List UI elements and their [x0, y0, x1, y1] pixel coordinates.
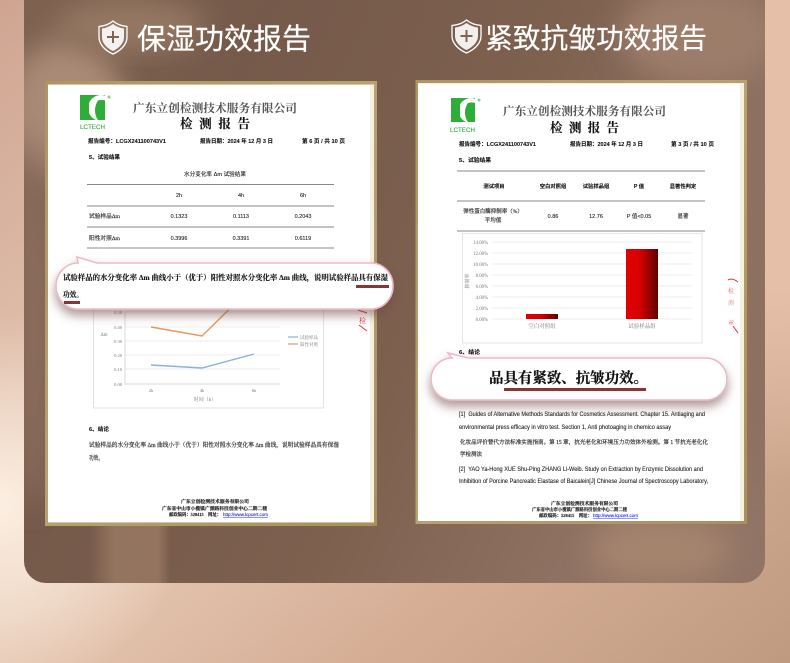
bar chart: elastase inhibition rate: [462, 234, 702, 343]
line chart: moisture change rate: 阳性对照: [300, 341, 318, 348]
results table: 阳性对照Δm: [89, 234, 121, 242]
bar chart: elastase inhibition rate: 空白对照组: [528, 322, 556, 330]
results table: 试验样品Δm: [89, 212, 121, 220]
red stamp fragment: 测: [728, 298, 734, 307]
conclusion text: 功效。: [89, 454, 103, 462]
footer address: 广东省中山市小榄镇广源路科技创业中心二期二楼: [532, 506, 627, 513]
line chart: moisture change rate: 4h: [200, 388, 205, 393]
report letterhead: 广东立创检测技术服务有限公司: [133, 101, 297, 115]
heading: moisturizing report: 保湿功效报告: [137, 23, 311, 56]
line chart: moisture change rate: 0.00: [114, 382, 123, 387]
logo: LCTECH: [80, 95, 114, 131]
logo: LCTECH: LCTECH: [450, 128, 475, 134]
report letterhead: [133, 101, 297, 131]
conclusion text: [89, 441, 339, 462]
results table: 0.1113: [233, 214, 249, 220]
conclusion heading: 6、结论: [459, 348, 481, 356]
report meta line: 报告日期：2024 年 12 月 3 日: [570, 140, 643, 148]
icon: shield with plus: [99, 21, 127, 54]
table title: 水分变化率 Δm 试验结果: [184, 170, 247, 178]
line chart: moisture change rate: 0.30: [114, 339, 123, 344]
report meta line: [459, 140, 715, 148]
results table: 0.2043: [295, 214, 311, 220]
bar chart: elastase inhibition rate: 8.00%: [476, 274, 488, 279]
results table: P 值: [634, 182, 645, 190]
report meta line: 报告日期：2024 年 12 月 3 日: [200, 137, 273, 145]
footer address: [162, 498, 268, 518]
line chart: moisture change rate: 0.40: [114, 325, 123, 330]
footer address: 邮政编码：528415 网址：: [169, 511, 221, 518]
footer address: http://www.lcpcert.com: [593, 513, 638, 518]
report letterhead: [503, 104, 666, 135]
results table: 0.6119: [295, 236, 311, 242]
line chart: moisture change rate: 试验样品: [300, 334, 318, 341]
callout: firming conclusion: [431, 353, 727, 400]
line chart: moisture change rate: 0.10: [114, 367, 123, 372]
references: Inhibition of Porcine Pancreatic Elastase of Baicalein[J] Chinese Journal of Spectroscopy Laboratory,: [459, 479, 708, 485]
report meta line: [88, 137, 346, 145]
callout: firming conclusion: 品具有紧致、抗皱功效。: [489, 369, 648, 387]
references: 学检测法: [460, 450, 482, 458]
bar chart: elastase inhibition rate: 4.00%: [476, 296, 488, 301]
results table: 显著: [677, 212, 689, 220]
bar chart: elastase inhibition rate: 0.00%: [476, 318, 488, 323]
footer address: [532, 500, 638, 519]
callout: moisturizing conclusion: 功效。: [63, 289, 83, 299]
results table: 4h: [238, 193, 244, 199]
references: 化妆品评价替代方法标准实施指南。第 15 章，抗光老化和环境压力功效体外检测。第 1 节抗光老化化: [460, 438, 708, 446]
results table: 2h: [176, 193, 182, 199]
results table: 6h: [300, 193, 306, 199]
report: moisturizing test certificate: [45, 81, 393, 526]
conclusion text: 试验样品的水分变化率 Δm 曲线小于（优于）阳性对照水分变化率 Δm 曲线，说明试验样品具有保湿: [89, 441, 339, 449]
bar chart: elastase inhibition rate: 12.00%: [473, 252, 488, 257]
report: firming and anti-wrinkle test certificate: [416, 80, 747, 524]
results table: 12.76: [589, 214, 603, 220]
report meta line: 报告编号：LCGX241100743V1: [459, 140, 536, 148]
report letterhead: 检 测 报 告: [550, 120, 619, 135]
references: [1] Guides of Alternative Methods Standards for Cosmetics Assessment. Chapter 15. Antiaging and: [459, 412, 705, 418]
references: [459, 412, 708, 485]
callout: moisturizing conclusion: 试验样品的水分变化率 Δm 曲线小于（优于）阳性对照水分变化率 Δm 曲线，说明试验样品具有保湿: [63, 272, 388, 283]
results table: 空白对照组: [540, 182, 567, 190]
bar chart: elastase inhibition rate: 10.00%: [473, 263, 488, 268]
certificate frame: [416, 80, 747, 524]
results table: P 值<0.05: [627, 212, 651, 220]
footer address: 广东立创检测技术服务有限公司: [181, 498, 250, 505]
results table: 0.86: [548, 214, 558, 220]
section heading: 5、试验结果: [89, 153, 121, 161]
bar chart: elastase inhibition rate: 抑制率: [464, 273, 471, 289]
report letterhead: 广东立创检测技术服务有限公司: [503, 104, 666, 118]
red stamp fragment: 检: [728, 286, 734, 295]
red stamp fragment: 章: [728, 318, 734, 327]
results table: 0.3996: [171, 236, 187, 242]
results table: 0.3391: [233, 236, 249, 242]
red stamp fragment: [358, 310, 367, 331]
line chart: moisture change rate: Δm: [100, 333, 108, 338]
footer address: 广东立创检测技术服务有限公司: [551, 500, 619, 507]
report meta line: 第 3 页 / 共 10 页: [671, 140, 715, 148]
heading: firming and anti-wrinkle report: 紧致抗皱功效报告: [485, 23, 707, 54]
red stamp fragment: 检: [359, 316, 366, 326]
results table: 试验样品组: [583, 182, 610, 190]
line chart: moisture change rate: 时间（h）: [194, 396, 216, 403]
report letterhead: 检 测 报 告: [180, 116, 250, 131]
line chart: moisture change rate: [94, 285, 324, 408]
results table: 0.1323: [171, 214, 187, 220]
bar chart: elastase inhibition rate: 6.00%: [476, 285, 488, 290]
bar chart: elastase inhibition rate: 14.00%: [473, 241, 488, 246]
report meta line: 第 6 页 / 共 10 页: [302, 137, 346, 145]
certificate frame: [45, 81, 377, 526]
logo: LCTECH: [450, 98, 484, 134]
callout: moisturizing conclusion: [56, 257, 393, 309]
logo: LCTECH: LCTECH: [80, 125, 105, 131]
conclusion heading: 6、结论: [89, 425, 110, 433]
footer address: http://www.lcpcert.com: [223, 512, 268, 517]
references: environmental press efficacy in vitro test. Section 1, Anti photoaging in chemico assay: [459, 425, 671, 431]
footer address: 邮政编码：528415 网址：: [539, 512, 592, 519]
results table: [457, 171, 705, 231]
section heading: 5、试验结果: [459, 156, 492, 164]
results table: 弹性蛋白酶抑制率（%）: [463, 207, 523, 215]
footer address: 广东省中山市小榄镇广源路科技创业中心二期二楼: [162, 505, 268, 512]
line chart: moisture change rate: 6h: [252, 388, 257, 393]
results table: [87, 184, 334, 248]
references: [2] YAO Ya-Hong XUE Shu-Ping ZHANG Li-Weib. Study on Extraction by Enzymic Dissolution and: [459, 467, 703, 473]
bar chart: elastase inhibition rate: 试验样品组: [628, 322, 656, 330]
line chart: moisture change rate: 2h: [149, 388, 154, 393]
line chart: moisture change rate: 0.50: [114, 310, 123, 315]
red stamp fragment: [728, 279, 738, 333]
results table: 显著性判定: [670, 182, 697, 190]
report meta line: 报告编号：LCGX241100743V1: [88, 137, 166, 145]
line chart: moisture change rate: 0.20: [114, 353, 123, 358]
results table: 平均值: [485, 216, 502, 224]
results table: 测试项目: [483, 182, 505, 190]
bar chart: elastase inhibition rate: 2.00%: [476, 307, 488, 312]
icon: shield with plus: [452, 20, 481, 53]
